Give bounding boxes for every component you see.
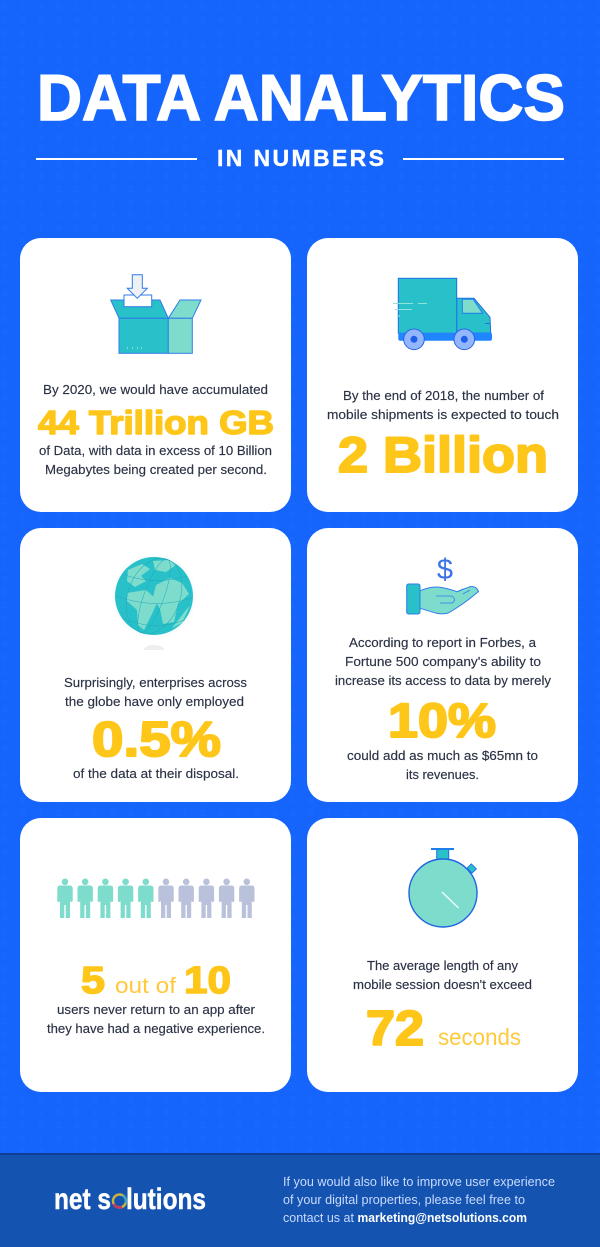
- text: enterprises: [64, 675, 247, 709]
- stat: 5 out of 10: 5: [81, 960, 105, 1002]
- text: Forbes report: Fortune 500 company's ability to: [345, 654, 541, 669]
- subtitle with rules: IN NUMBERS: [217, 145, 384, 171]
- stat: 72 seconds: [366, 1002, 521, 1056]
- panel: 0.5%: [20, 528, 291, 802]
- text: contact call to action: contact us at: [283, 1210, 354, 1225]
- stat: 5 out of 10: out of: [115, 973, 177, 998]
- stat: 72 seconds: 72: [366, 1002, 424, 1056]
- footer: [0, 1153, 600, 1247]
- text: contact call to action: If you would also like to improve user experience: [283, 1174, 555, 1189]
- panel: 5 out of 10: [20, 818, 291, 1092]
- text: users never return: users never return to an app after: [57, 1002, 256, 1017]
- stat: 2 Billion: 2 Billion: [338, 427, 548, 483]
- panel: 72 seconds: [307, 818, 578, 1092]
- text: session length: mobile session doesn't exceed: [353, 977, 532, 992]
- text: Forbes report: increase its access to data by merely: [335, 673, 551, 688]
- text: disposal: of the data at their disposal.: [73, 766, 239, 781]
- text: Forbes report: According to report in Forbes, a: [349, 635, 537, 650]
- stat: 0.5%: 0.5%: [92, 713, 221, 767]
- icon: globe: [112, 550, 196, 650]
- panel: 2 Billion: [307, 238, 578, 512]
- text: data per second: Megabytes being created per second.: [45, 462, 267, 477]
- text: data per second: of Data, with data in excess of 10 Billion: [39, 443, 272, 458]
- stat: 10%: 10%: [388, 695, 496, 748]
- text: session length: The average length of any: [367, 958, 518, 973]
- stat: 5 out of 10: 10: [184, 960, 231, 1002]
- icon: hand with dollar: $: [437, 554, 453, 586]
- text: mobile shipments: mobile shipments is expected to touch: [327, 407, 559, 422]
- icon: stopwatch: [409, 848, 477, 927]
- icon: row of ten people: [57, 878, 254, 918]
- text: contact call to action: of your digital properties, please feel free to: [283, 1192, 525, 1207]
- panel: 44 Trillion GB: [20, 238, 291, 512]
- header: [36, 61, 565, 171]
- text: accumulated: By 2020, we would have accumulated: [43, 382, 268, 397]
- text: contact call to action: marketing@netsolutions.com: [358, 1210, 527, 1225]
- text: Forbes report: [335, 635, 551, 688]
- stat: 44 Trillion GB: 44 Trillion GB: [38, 404, 274, 441]
- text: revenues: its revenues.: [406, 767, 479, 782]
- text: users never return: they have had a negative experience.: [47, 1021, 265, 1036]
- text: mobile shipments: By the end of 2018, the number of: [343, 388, 544, 403]
- stat: 5 out of 10: [81, 960, 231, 1002]
- text: enterprises: the globe have only employed: [65, 694, 244, 709]
- text: users never return: [47, 1002, 265, 1036]
- text: session length: [353, 958, 532, 992]
- stat: 72 seconds: seconds: [438, 1024, 521, 1050]
- text: data per second: [39, 443, 272, 477]
- text: mobile shipments: [327, 388, 559, 422]
- icon: delivery truck: [393, 278, 492, 350]
- text: contact call to action: [283, 1174, 555, 1225]
- icon: hand with dollar: [407, 554, 478, 614]
- text: revenues: [347, 748, 538, 782]
- title: DATA ANALYTICS: [37, 61, 565, 134]
- text: revenues: could add as much as $65mn to: [347, 748, 538, 763]
- panel: 10%: [307, 528, 578, 802]
- logo: net solutions: net solutions: [54, 1183, 206, 1216]
- text: enterprises: Surprisingly, enterprises across: [64, 675, 247, 690]
- icon: box with download arrow: [111, 275, 201, 353]
